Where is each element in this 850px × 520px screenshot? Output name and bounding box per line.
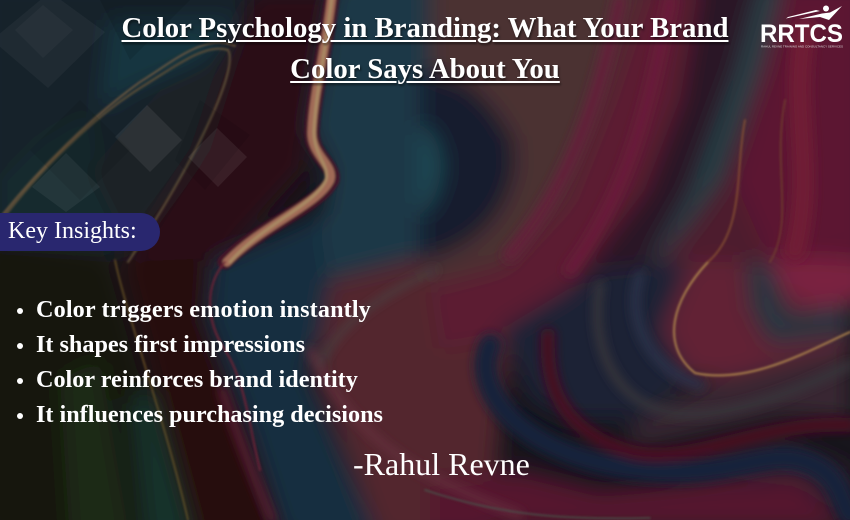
logo tagline: RAHUL REVNE TRAINING AND CONSULTANCY SERVICES [761, 44, 843, 48]
bullet list [17, 296, 383, 428]
key insights pill [0, 213, 160, 251]
decorative marble streaks [225, 0, 332, 262]
title: Color Psychology in Branding: What Your Brand Color Says About You [122, 12, 728, 85]
logo: RRTCS [760, 6, 843, 48]
key insights pill: Key Insights: [8, 218, 137, 244]
bullet list: Color triggers emotion instantly [36, 296, 371, 323]
logo wordmark: RRTCS [760, 20, 843, 48]
author: -Rahul Revne [353, 446, 530, 482]
bullet list: It influences purchasing decisions [36, 401, 383, 428]
icon: swoosh figure [786, 6, 842, 20]
bullet list: It shapes first impressions [36, 331, 305, 358]
decorative diamonds [0, 0, 247, 212]
bullet list: Color reinforces brand identity [36, 366, 358, 393]
